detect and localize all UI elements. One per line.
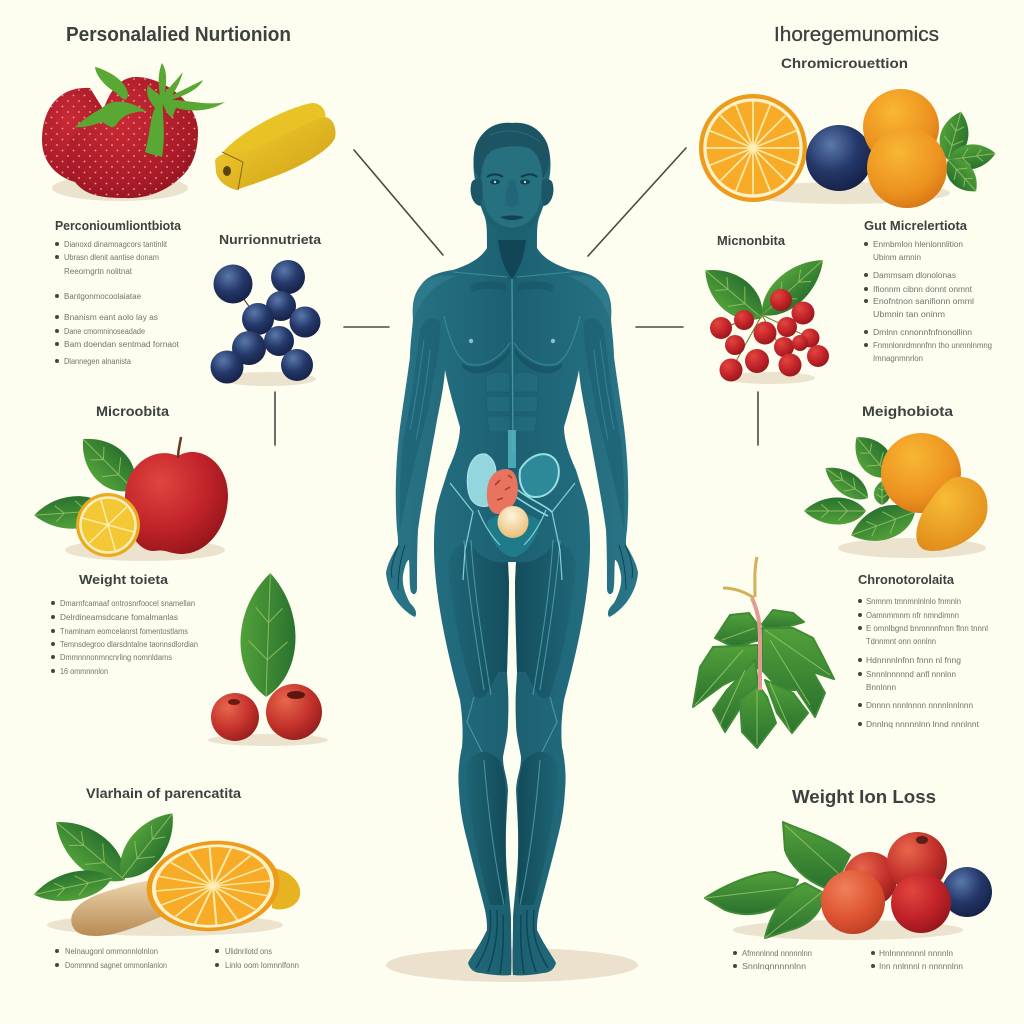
silhouette bbox=[386, 123, 638, 975]
subtitle: Chromicrouettion bbox=[781, 55, 908, 71]
bullet list: Snnnlnnnnnd anfl nnnlnn bbox=[866, 670, 956, 679]
heading: vitamin of parencatita: Vlarhain of parencatita bbox=[86, 785, 241, 801]
bullet list: Bantgonmocoolaiatae bbox=[64, 292, 142, 301]
bullet list: Hdnnnnlnfnn fnnn nl fnng bbox=[866, 656, 961, 665]
head bbox=[471, 123, 553, 236]
icon: apple with lemon bbox=[33, 426, 228, 564]
bullet list: Reeorngrtn nolitnat bbox=[64, 267, 133, 276]
icon: leaf with cherries bbox=[208, 572, 328, 746]
bullet list: Temnsdegroo dlarsdntalne taonnsdlordian bbox=[60, 640, 198, 649]
title: top left: Personalalied Nurtionion bbox=[66, 24, 291, 46]
bullet list: Oamnmmnm nfr nmndimnn bbox=[866, 611, 959, 620]
panel: apple microbiota bbox=[33, 403, 228, 676]
icon: fruit and leaves bbox=[705, 822, 992, 940]
heading: micronbita: Micnonbita bbox=[717, 233, 786, 248]
bullet list: Dnnnn nnnlnnnn nnnnlnnlnnn bbox=[866, 701, 973, 710]
bullet list: Dmmnnnonmncnrling nomnldams bbox=[60, 653, 172, 662]
heading: personal microbiota: Perconioumliontbiota bbox=[55, 219, 182, 233]
bullet list bbox=[858, 597, 988, 729]
bullet list: Enofntnon sanifionn omml bbox=[873, 297, 974, 306]
bullet list: Linlo oom lomnnlfonn bbox=[225, 961, 299, 970]
bullet list bbox=[55, 947, 299, 970]
bullet list: Dnnlnq nnnnnlnn lnnd nnnlnnt bbox=[866, 720, 980, 729]
bullet list: Hnlnnnnnnnl nnnnln bbox=[879, 949, 953, 958]
organs: digestive system bbox=[450, 430, 575, 580]
bullet list: Ifionnm cibnn donnt onmnt bbox=[873, 285, 973, 294]
icon: citrus, plum and leaves bbox=[699, 89, 997, 208]
muscle shading bbox=[391, 240, 633, 974]
heading: gut microbiota: Gut Micrelertiota bbox=[864, 219, 968, 233]
bullet list: Snmnm tmnmnlnlnlo fnmnln bbox=[866, 597, 961, 606]
bullet list: Tdnnmnt onn onnlnn bbox=[866, 637, 936, 646]
bullet list: Ubinm amnin bbox=[873, 253, 921, 262]
bullet list: Bam doendan sentmad fornaot bbox=[64, 340, 180, 349]
bullet list: Ubmnin tan oninm bbox=[873, 310, 945, 319]
icon: red berries and leaves bbox=[694, 248, 834, 384]
bullet list: Dane cmomninoseadade bbox=[64, 327, 145, 336]
panel: red berries bbox=[694, 233, 834, 384]
bullet list: Afmnnlnnd nnnnnlnn bbox=[742, 949, 812, 958]
bullet list: E omnlbgnd bnmnnnfnnn flnn tnnnl bbox=[866, 624, 988, 633]
heading: weight: Weight toieta bbox=[79, 572, 169, 587]
icon: banana bbox=[215, 103, 336, 190]
bullet list: Ubrasn dlenit aantise donam bbox=[64, 253, 159, 262]
heading: nutrition nutrieta: Nurrionnutrieta bbox=[219, 232, 322, 247]
heading: chronotorolaita: Chronotorolaita bbox=[858, 572, 955, 587]
panel: mango and orange bbox=[804, 403, 988, 729]
bullet list: Dmarnfcamaaf ontrosnrfoocel snamellan bbox=[60, 599, 195, 608]
bullet list: Imnagnmnrlon bbox=[873, 354, 923, 363]
bullet list: Nelnaugonl ommonnlolnlon bbox=[65, 947, 158, 956]
bullet list: Inn nnlnnnl n nnnnnlnn bbox=[879, 962, 963, 971]
connector lines bbox=[275, 148, 758, 445]
bullet list: Bnanism eant aolo lay as bbox=[64, 313, 158, 322]
bullet list: Tnamlnam eomcelanrst fomentostlams bbox=[60, 627, 188, 636]
panel: top-right bbox=[699, 24, 997, 363]
panel: top-left Personalized Nutrition bbox=[42, 24, 336, 366]
bullet list: Dammsam dlonolonas bbox=[873, 271, 956, 280]
bullet list: Bnnlnnn bbox=[866, 683, 896, 692]
bullet list: Snnlnqnnnnnlnn bbox=[742, 962, 806, 971]
ground shadow bbox=[386, 948, 638, 982]
heading: microbita: Microobita bbox=[96, 403, 169, 419]
bullet list: Dlannegen alnanista bbox=[64, 357, 131, 366]
bullet list: 16 ommnnnlon bbox=[60, 667, 108, 676]
bullet list: Enmbmlon hlenlonnlition bbox=[873, 240, 963, 249]
body figure bbox=[386, 123, 638, 982]
bullet list: Dmlnn cnnonnfnfnonollinn bbox=[873, 328, 972, 337]
bullet list bbox=[51, 599, 198, 676]
bullet list: Delrdineamsdcane fomalmanlas bbox=[60, 613, 178, 622]
bullet list: Dianoxd dinamnagcors tantinlit bbox=[64, 240, 168, 249]
heading: meighobiota: Meighobiota bbox=[862, 403, 953, 419]
title: top right: Ihoregemunomics bbox=[774, 24, 939, 46]
panel: blueberries bbox=[210, 232, 322, 386]
bullet list: Dommnnd sagnet ommonlanlon bbox=[65, 961, 167, 970]
heading: weight ion loss: Weight Ion Loss bbox=[792, 787, 936, 807]
panel: bottom-left bbox=[31, 785, 300, 970]
icon: leaves, ginger and orange slice bbox=[31, 802, 300, 937]
icon: blueberry cluster bbox=[210, 260, 320, 386]
icon: herb sprig bbox=[693, 557, 834, 748]
panel: bottom-right weight loss bbox=[705, 787, 992, 971]
bullet list bbox=[55, 240, 180, 366]
bullet list: Fnmnlonrdmnnfnn tho unmnlnmng bbox=[873, 341, 992, 350]
bullet list bbox=[864, 240, 992, 363]
icon: orange, mango and leaves bbox=[804, 427, 988, 558]
bullet list: Ulidnrilotd ons bbox=[225, 947, 272, 956]
bullet list bbox=[733, 949, 963, 971]
icon: strawberries bbox=[42, 63, 225, 201]
